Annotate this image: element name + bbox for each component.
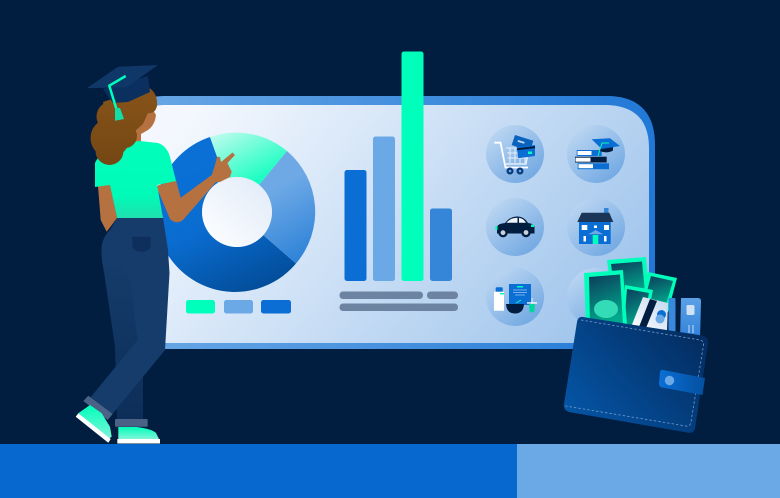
- pocket: [132, 237, 151, 252]
- graduation cap: [87, 65, 158, 121]
- back shoe: [117, 427, 160, 444]
- wallet clasp: [659, 370, 705, 395]
- icon: house: [567, 198, 625, 256]
- icon: shopping cart with credit cards: [486, 125, 544, 183]
- character: student pointing at chart: [76, 65, 235, 444]
- icon circle behind wallet: [567, 268, 625, 326]
- left arm: [98, 184, 117, 232]
- pointing arm: [156, 152, 235, 222]
- shirt: [95, 141, 176, 218]
- ground band: [0, 444, 780, 498]
- hair: [90, 87, 157, 165]
- front leg and hips: [90, 218, 170, 415]
- icon: groceries and food: [486, 268, 544, 326]
- icon: books and graduation cap: [567, 125, 625, 183]
- back leg: [101, 248, 143, 420]
- banknotes: [584, 257, 677, 330]
- front cuff: [83, 396, 113, 420]
- icon: car: [486, 198, 544, 256]
- back cuff: [115, 419, 148, 427]
- front shoe: [76, 405, 112, 443]
- panel: dashboard screen: [130, 96, 655, 349]
- wallet: [564, 317, 708, 433]
- donut chart: [156, 133, 315, 292]
- donut legend: [186, 300, 291, 314]
- bar chart: [344, 52, 452, 281]
- credit cards in wallet: [631, 297, 701, 340]
- neck and face: [130, 105, 156, 145]
- bar chart caption lines: [340, 292, 458, 311]
